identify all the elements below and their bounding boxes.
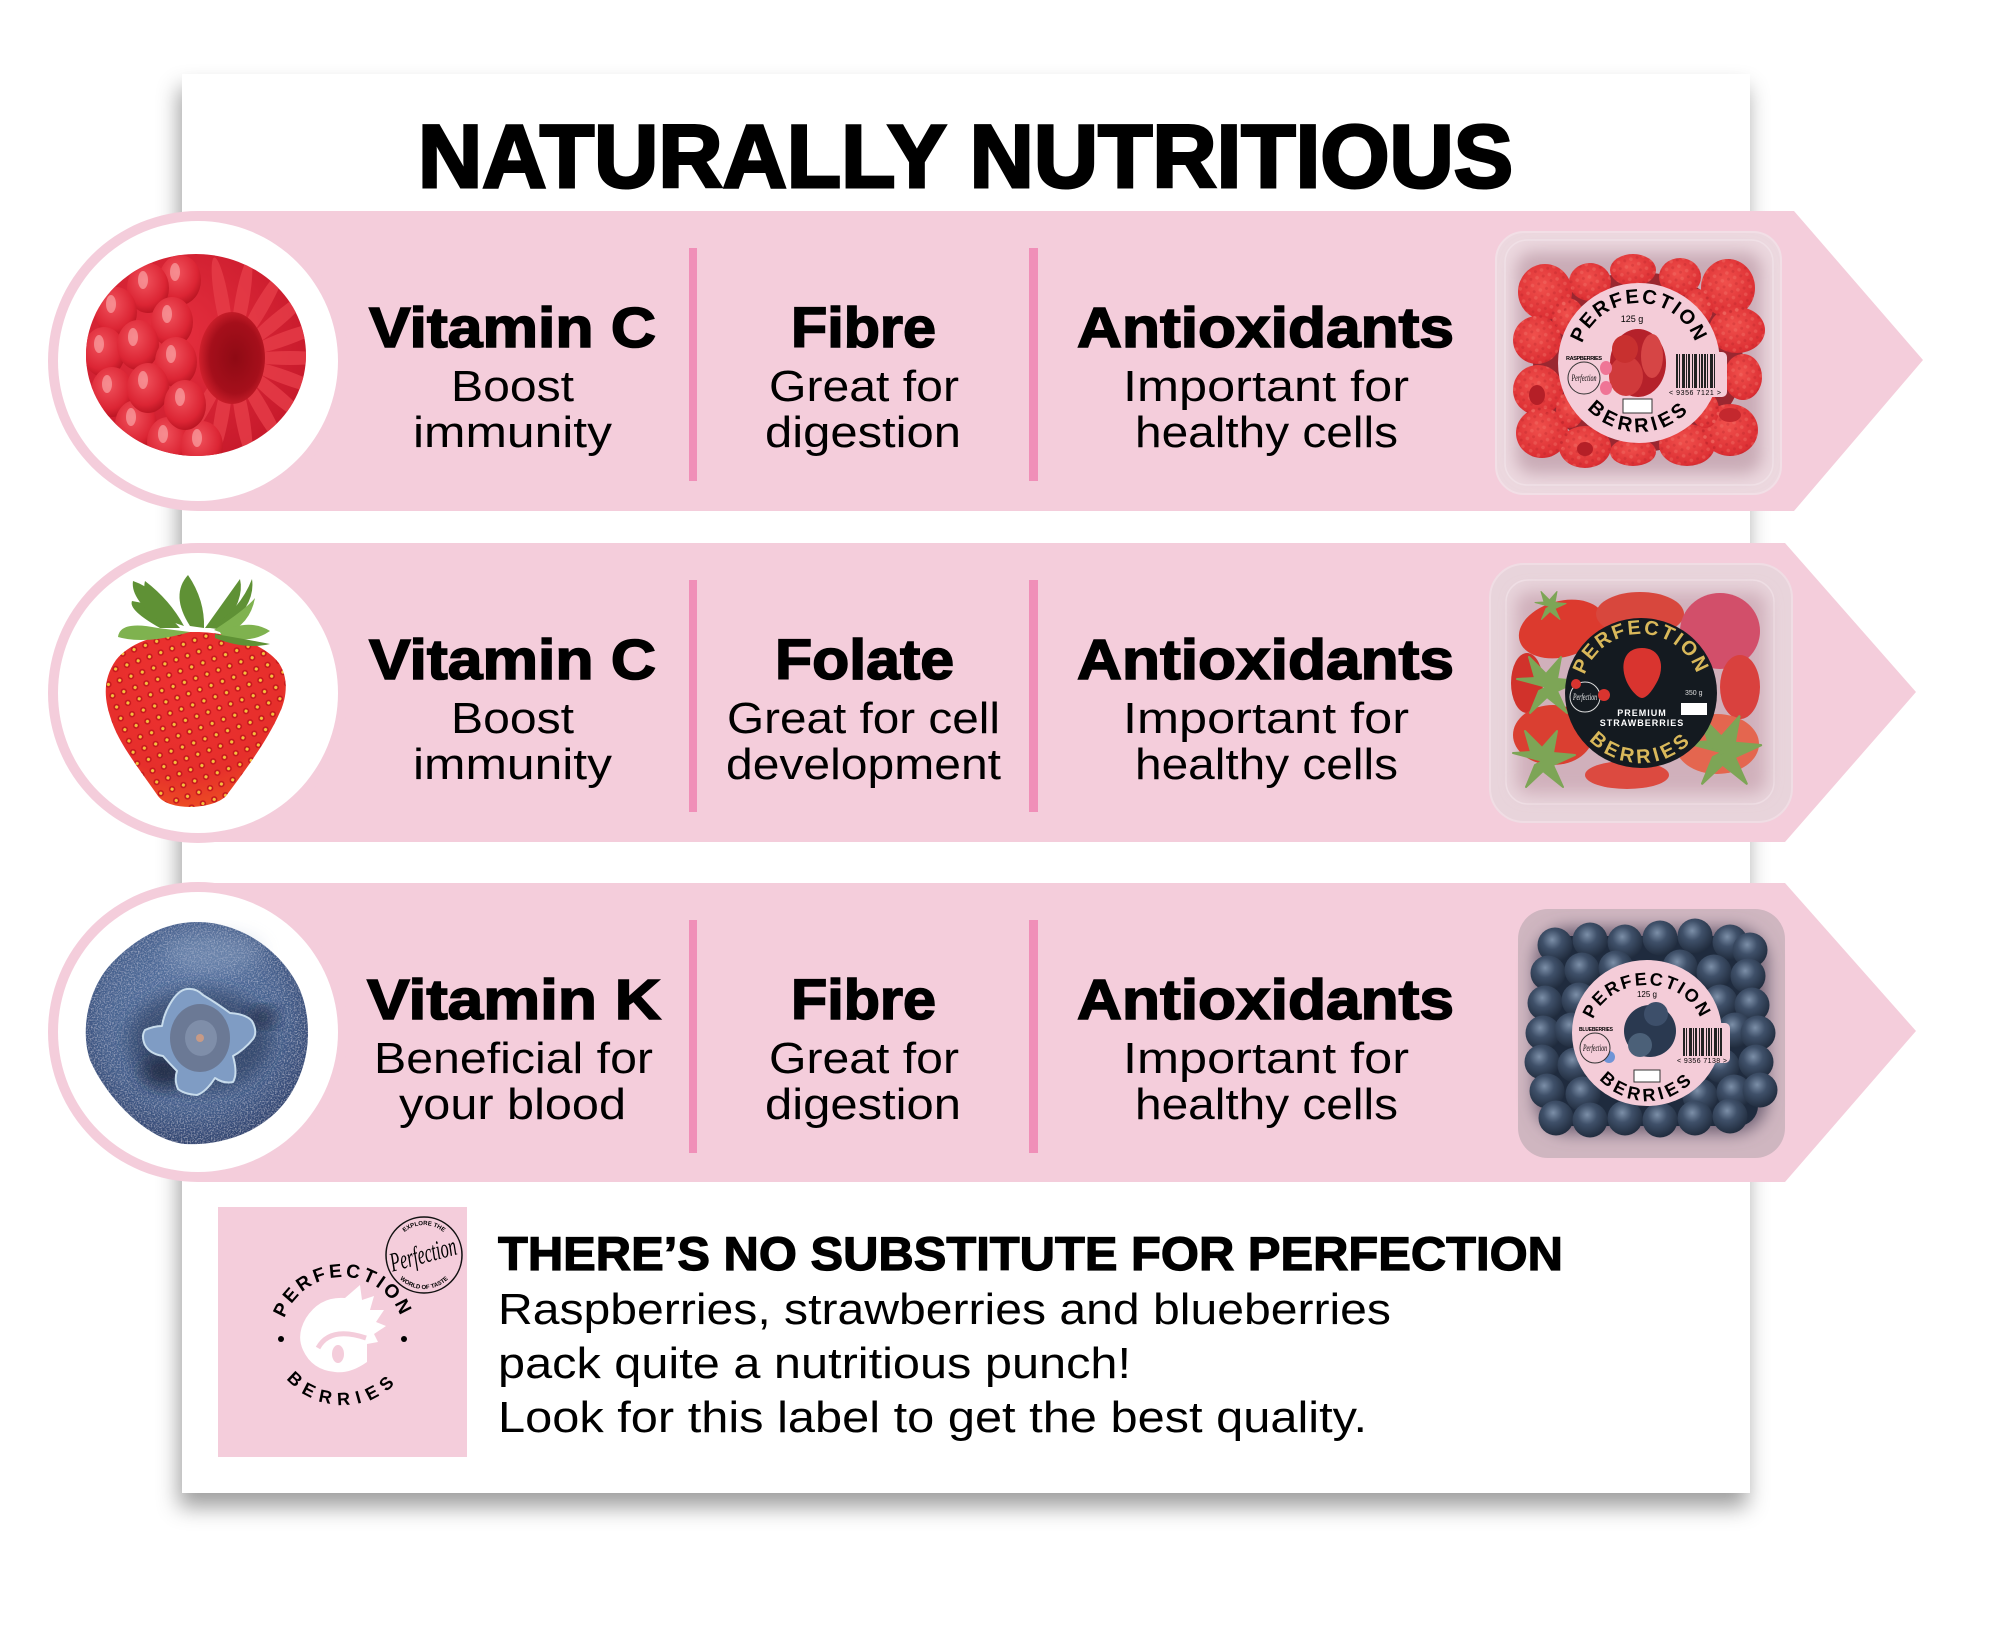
- panel: strawberry row: [48, 543, 1916, 843]
- text: antioxidants: [1077, 296, 1454, 457]
- product: blueberry pack: 125 g: [1637, 990, 1657, 999]
- circle frame: [48, 882, 348, 1182]
- text: vitamin k: your blood: [399, 1080, 626, 1129]
- text: antioxidants: Antioxidants: [1077, 968, 1454, 1032]
- text: fibre: Great for: [769, 362, 959, 411]
- text: vitamin k: Vitamin K: [367, 968, 661, 1032]
- text: fibre: Great for: [769, 1034, 959, 1083]
- text: folate: Folate: [775, 628, 954, 692]
- product: raspberry pack: PERFECTION: [1570, 289, 1708, 342]
- text: vitamin c: Vitamin C: [369, 296, 656, 360]
- arrow band: [198, 883, 1916, 1182]
- text: antioxidants: Antioxidants: [1077, 296, 1454, 360]
- text: antioxidants: healthy cells: [1135, 408, 1398, 457]
- text: antioxidants: healthy cells: [1135, 1080, 1398, 1129]
- circle frame: [48, 211, 348, 511]
- text: fibre: digestion: [765, 1080, 961, 1129]
- text: vitamin c: immunity: [413, 408, 612, 457]
- logo wordmark: BERRIES: [286, 1370, 393, 1406]
- product: strawberry pack: 350 g: [1685, 690, 1703, 697]
- icon: white raspberry mark: [300, 1285, 386, 1372]
- product: blueberry pack: PERFECTION: [1582, 972, 1711, 1018]
- text: fibre: digestion: [765, 408, 961, 457]
- text: vitamin c: [369, 296, 656, 457]
- text: antioxidants: [1077, 968, 1454, 1129]
- panel: raspberry row: [48, 211, 1923, 511]
- text: antioxidants: Antioxidants: [1077, 628, 1454, 692]
- text: fibre: Fibre: [791, 296, 936, 360]
- text: fibre: Fibre: [791, 968, 936, 1032]
- product: raspberry pack: 125 g: [1621, 314, 1643, 324]
- circle inner: [58, 221, 338, 501]
- stamp: perfection badge: [385, 1216, 463, 1294]
- stamp: perfection badge: WORLD OF TASTE: [400, 1276, 448, 1290]
- text: vitamin k: Beneficial for: [374, 1034, 653, 1083]
- icon: strawberry: [106, 575, 286, 807]
- text: antioxidants: Important for: [1123, 362, 1409, 411]
- product: strawberry pack: STRAWBERRIES: [1600, 718, 1684, 728]
- product: strawberry pack: [1489, 563, 1793, 823]
- icon: raspberry: [86, 254, 306, 456]
- product: raspberry pack: [1495, 231, 1782, 495]
- text: vitamin c: Boost: [451, 362, 574, 411]
- text: antioxidants: [1077, 628, 1454, 789]
- product: raspberry pack: RASPBERRIES: [1566, 356, 1602, 362]
- product: blueberry pack: BERRIES: [1600, 1071, 1690, 1102]
- product: strawberry pack: PERFECTION: [1572, 620, 1709, 674]
- text: folate: [726, 628, 1001, 789]
- product: blueberry pack: BLUEBERRIES: [1579, 1027, 1614, 1033]
- text: fibre: [765, 968, 961, 1129]
- text: vitamin c: Boost: [451, 694, 574, 743]
- text: vitamin c: [369, 628, 656, 789]
- product: blueberry pack: Perfection: [1582, 1043, 1607, 1053]
- product: raspberry pack: BERRIES: [1588, 400, 1686, 432]
- text: substitute callout: Raspberries, strawberries and blueberries: [498, 1285, 1391, 1334]
- text: folate: development: [726, 740, 1001, 789]
- logo wordmark: PERFECTION: [272, 1264, 412, 1318]
- circle inner: [58, 553, 338, 833]
- product: blueberry pack: < 9356 7138 >: [1677, 1058, 1727, 1065]
- title: NATURALLY NUTRITIOUS: [418, 106, 1513, 206]
- text: vitamin k: [367, 968, 661, 1129]
- panel: perfection logo: [218, 1207, 467, 1457]
- text: vitamin c: Vitamin C: [369, 628, 656, 692]
- text: fibre: [765, 296, 961, 457]
- arrow band: [198, 211, 1923, 511]
- text: substitute callout: Look for this label to get the best quality.: [498, 1393, 1367, 1442]
- text: substitute callout: pack quite a nutritious punch!: [498, 1339, 1131, 1388]
- text: antioxidants: healthy cells: [1135, 740, 1398, 789]
- product: blueberry pack: [1518, 909, 1785, 1158]
- logo wordmark: [272, 1264, 412, 1406]
- text: substitute callout: [498, 1227, 1563, 1442]
- card background: [182, 74, 1750, 1493]
- product: strawberry pack: Perfection: [1572, 692, 1597, 702]
- product: raspberry pack: < 9356 7121 >: [1669, 390, 1721, 397]
- text: folate: Great for cell: [727, 694, 1000, 743]
- text: vitamin c: immunity: [413, 740, 612, 789]
- circle inner: [58, 892, 338, 1172]
- arrow band: [198, 543, 1916, 842]
- stamp: perfection badge: Perfection: [386, 1231, 460, 1278]
- text: antioxidants: Important for: [1123, 1034, 1409, 1083]
- product: strawberry pack: BERRIES: [1590, 730, 1688, 764]
- product: strawberry pack: PREMIUM: [1617, 708, 1667, 718]
- product: raspberry pack: Perfection: [1571, 373, 1597, 383]
- text: substitute callout: THERE’S NO SUBSTITUTE FOR PERFECTION: [498, 1227, 1563, 1280]
- text: antioxidants: Important for: [1123, 694, 1409, 743]
- icon: blueberry: [86, 922, 308, 1144]
- panel: blueberry row: [48, 882, 1916, 1182]
- stamp: perfection badge: EXPLORE THE: [402, 1220, 446, 1232]
- circle frame: [48, 543, 348, 843]
